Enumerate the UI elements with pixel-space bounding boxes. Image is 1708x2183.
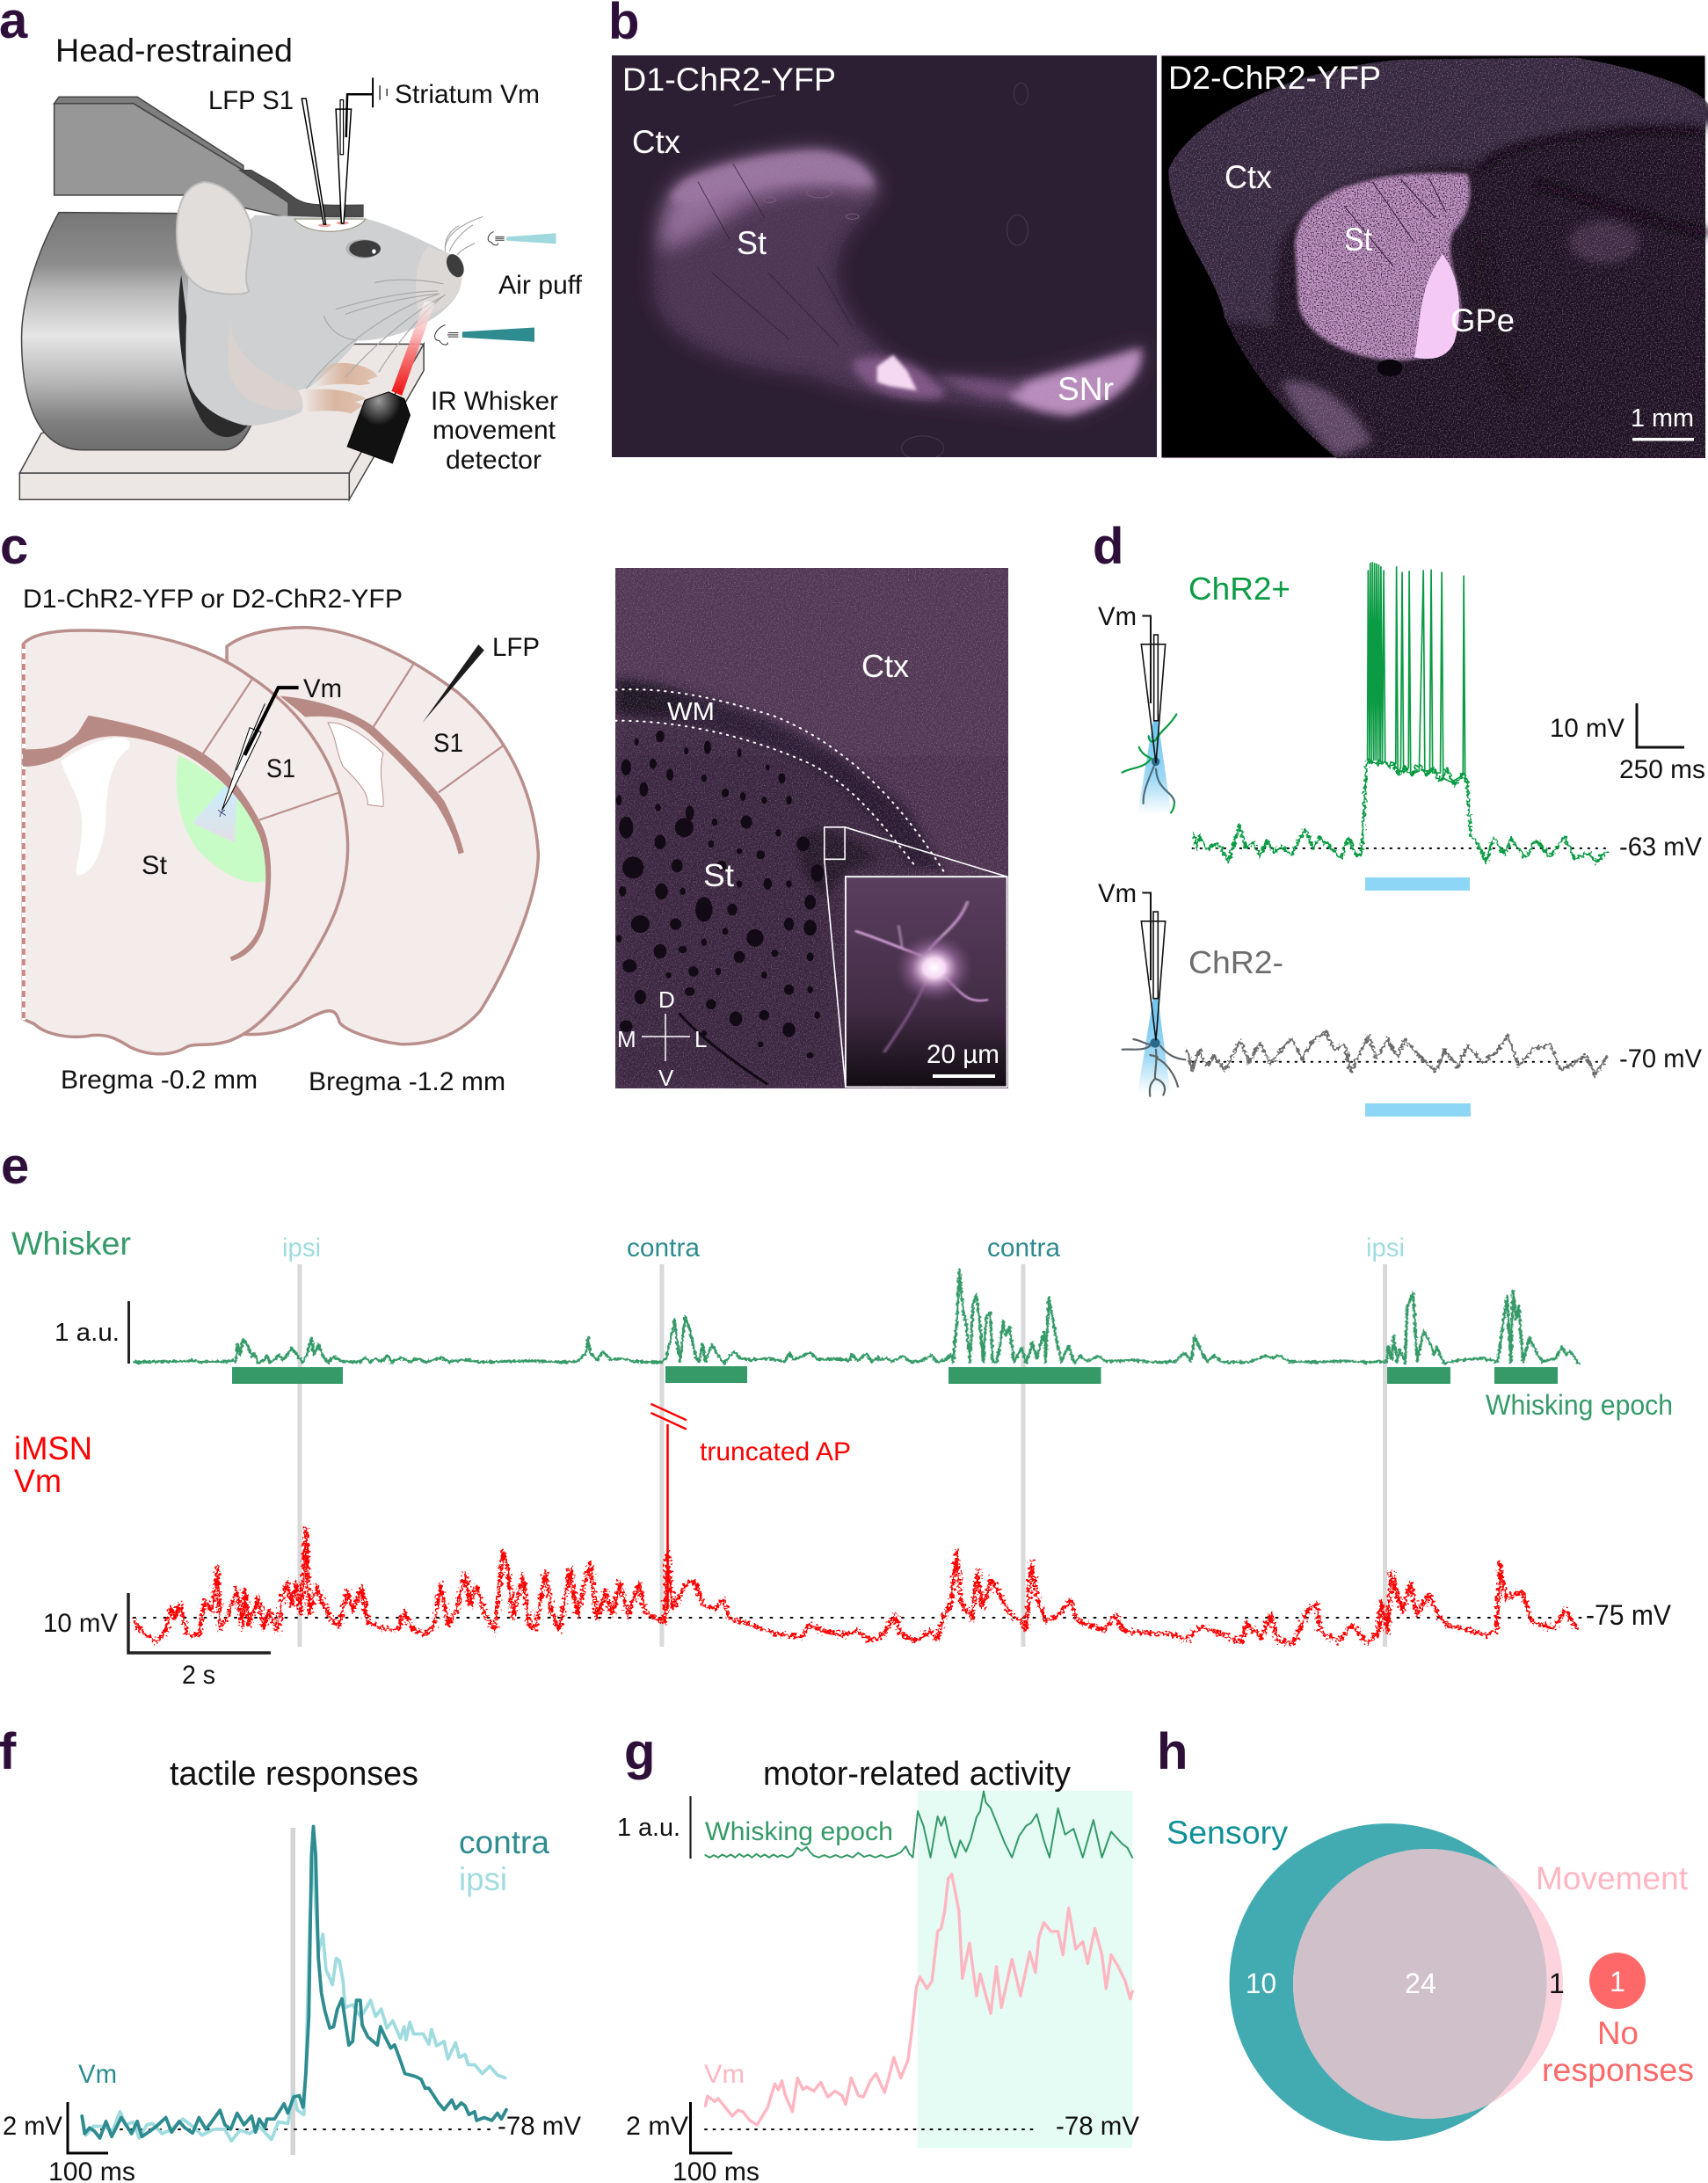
label: Air puff: Air puff [498,271,583,300]
panel e: whisker and Vm recording [1,1138,1673,1690]
label Whisking epoch: Whisking epoch [1486,1389,1673,1421]
icon: pipette on ChR2- neuron [1123,892,1185,1096]
truncated action potential [666,1424,669,1609]
labels on schematic: Vm [303,674,342,703]
scale and potential labels: 10 mV [43,1609,118,1638]
panel f: tactile responses [0,1723,581,2183]
scale and potential labels [1550,714,1705,1073]
LFP electrode [302,98,326,224]
labels on images: GPe [1450,302,1515,338]
light stimulus bars [1365,877,1471,1117]
eye [345,239,381,258]
label Whisking epoch: Whisking epoch [705,1817,893,1846]
label No responses: No [1597,2015,1639,2051]
title motor-related activity: motor-related activity [763,1756,1071,1793]
ear [177,182,251,295]
midline dashed [22,643,25,1020]
scale bar 1 mm [1632,438,1694,441]
label 1 a.u.: 1 a.u. [617,1814,680,1842]
label: IR whisker movement detector: movement [432,416,556,445]
coronal brain sections schematic [23,628,538,1054]
label iMSN Vm [14,1430,92,1499]
grey voltage trace [1187,1031,1607,1075]
snout [416,246,462,317]
labels on images: SNr [1058,371,1114,407]
label iMSN Vm: Vm [14,1463,62,1499]
truncation marks [650,1404,687,1430]
scale and potential labels: 2 mV [626,2112,688,2141]
labels on images: 1 mm [1631,404,1694,433]
inset: filled neuron [846,877,1007,1087]
green expression area [177,755,268,883]
scale and potential labels: 2 mV [3,2112,62,2141]
scale and potential labels: -70 mV [1619,1044,1702,1073]
stimulus labels [282,1233,1405,1263]
Vm labels: Vm [1098,879,1137,908]
green trace baseline and plateau [1194,760,1607,862]
histology image with inset [615,568,1008,1091]
ipsi trace [82,1840,505,2141]
limb shading and paws [228,317,377,413]
whisking highlight region [918,1791,1132,2148]
label Movement: Movement [1536,1860,1689,1896]
whisker trace [134,1270,1578,1363]
scale bar d [1637,703,1684,747]
labels on schematic: Bregma -1.2 mm [309,1067,505,1096]
legend contra ipsi: contra [459,1824,549,1860]
scale and potential labels: -78 mV [1056,2112,1139,2141]
scale and potential labels: 10 mV [1550,714,1624,743]
scale and potential labels: -75 mV [1586,1599,1672,1631]
label Vm: Vm [704,2060,745,2089]
labels on images: St [1344,222,1373,258]
label 1 a.u.: 1 a.u. [55,1319,120,1347]
panel c: recording schematic and image [0,518,1008,1096]
scale bar 1 a.u. [127,1301,130,1364]
whisker trace [705,1791,1132,1858]
image labels: St [703,857,734,893]
labels on schematic: S1 [266,754,295,783]
label: IR whisker movement detector: detector [446,446,541,475]
corpus callosum front [23,716,271,961]
scale and potential labels: 250 ms [1619,755,1705,784]
labels on images [622,60,1694,433]
label: LFP S1: LFP S1 [208,86,294,115]
Venn counts: 1 [1549,1968,1565,1999]
legend contra ipsi [459,1824,549,1897]
heading: Head-restrained: Head-restrained [55,33,293,69]
label No responses: responses [1542,2052,1694,2088]
stimulus labels: contra [627,1233,700,1263]
air puff contra nozzle [435,325,534,345]
striatal fibre bundles [616,731,824,1059]
green action potentials [1368,563,1465,782]
nose [443,252,467,279]
front section Bregma -0.2 [23,630,348,1054]
scale and potential labels: -63 mV [1619,833,1702,862]
labels on images: St [737,225,767,261]
back corpus callosum [280,696,464,855]
image labels: Ctx [861,648,909,684]
red Vm trace [134,1529,1577,1644]
labels on schematic: LFP [492,633,540,662]
label ChR2-: ChR2- [1188,944,1283,980]
LFP electrode [423,644,484,723]
labels on schematic: Bregma -0.2 mm [61,1066,258,1095]
image labels: L [694,1026,707,1052]
pink Vm trace [705,1874,1132,2125]
panel letter c: c [0,518,28,575]
scale bar 10 mV, 2 s [128,1593,271,1653]
panel a: head-restrained setup [0,0,583,499]
labels on schematic [61,633,540,1096]
orientation cross [642,1014,690,1061]
stimulus labels: contra [987,1233,1060,1263]
label No responses [1542,2015,1694,2088]
no-response marker: 1 [1610,1966,1625,1997]
no-response marker [1589,1953,1646,2009]
base plate [19,344,424,499]
ventricle front [61,738,130,876]
air puff ipsi nozzle [488,231,556,245]
Venn counts [1246,1968,1565,1999]
scale and potential labels [3,2112,581,2183]
baseline dotted lines [1193,848,1607,1062]
labels on images: Ctx [1225,159,1272,195]
image labels [617,648,999,1091]
panel letter d: d [1093,518,1123,575]
mouse body [185,215,462,426]
label Vm: Vm [78,2060,117,2089]
jaw line and whiskers [306,216,483,389]
labels on schematic: St [142,851,168,880]
panel b: histology images [608,0,1708,460]
panel d: optogenetic identification [1093,518,1705,1117]
mouse apparatus illustration [19,77,556,499]
contra trace [82,1826,506,2138]
label ChR2+: ChR2+ [1188,571,1290,607]
heading: D1-ChR2-YFP or D2-ChR2-YFP: D1-ChR2-YFP or D2-ChR2-YFP [23,585,403,614]
Venn counts: 24 [1405,1968,1436,1999]
image labels: 20 µm [927,1040,999,1069]
image labels: M [617,1026,636,1052]
stimulus marker lines [300,1264,1385,1647]
labels on images: Ctx [632,124,680,160]
scale bar f [68,2102,108,2153]
label Whisker: Whisker [11,1226,131,1262]
stimulus marker [290,1828,295,2155]
zoom box and connector lines [825,827,1007,1088]
baseline dotted line [134,1617,1582,1619]
Venn circles [1229,1823,1563,2141]
white matter dotted borders [615,689,945,873]
scale and potential labels: 2 s [182,1661,215,1690]
panel h: Venn diagram [1157,1723,1694,2141]
label Sensory: Sensory [1167,1815,1289,1851]
baseline dotted line [91,2128,497,2130]
labels on images: D2-ChR2-YFP [1168,60,1381,96]
scale bar g [691,2102,732,2153]
title tactile responses: tactile responses [170,1756,418,1793]
baseline dotted line [705,2128,1037,2130]
head mount [55,97,363,218]
image labels: WM [667,698,715,726]
IR detector [347,392,410,463]
midline dashed overlay [22,643,25,1020]
scale and potential labels [626,2112,1139,2183]
labels on images: D1-ChR2-YFP [622,62,836,98]
craniotomy [294,219,366,231]
image labels: D [658,986,675,1013]
label: IR whisker movement detector [431,387,558,475]
whisking epoch bars [232,1366,1558,1384]
panel letter g: g [624,1723,655,1780]
scale and potential labels: -78 mV [498,2112,581,2141]
label: IR whisker movement detector: IR Whisker [431,387,558,416]
scale bar 20 um [933,1074,995,1078]
label iMSN Vm: iMSN [14,1430,92,1466]
IR beam [392,301,435,396]
panel letter e: e [1,1138,29,1195]
label truncated AP: truncated AP [700,1437,851,1466]
image labels: V [658,1065,674,1091]
light cone [193,779,238,843]
scale and potential labels [43,1599,1672,1690]
Vm pipette [218,688,299,817]
stimulus labels: ipsi [282,1233,321,1263]
icon: pipette on ChR2+ neuron [1123,615,1176,814]
legend contra ipsi: ipsi [459,1861,507,1897]
labels on schematic: S1 [433,729,463,758]
image: D2-ChR2-YFP section [1154,52,1708,458]
scale bar 1 a.u. [689,1796,692,1859]
cylinder tube [22,213,251,450]
panel g: motor-related activity [617,1723,1139,2183]
stimulus labels: ipsi [1366,1233,1405,1263]
label: Striatum Vm: Striatum Vm [395,80,540,109]
Vm labels [1098,602,1137,908]
image: D1-ChR2-YFP section [612,55,1157,460]
panel letter h: h [1157,1723,1188,1780]
back ventricle [328,723,383,806]
Venn counts: 10 [1246,1968,1276,1999]
back section Bregma -1.2 [227,628,538,1044]
Vm pipette with wire [336,77,387,223]
Vm labels: Vm [1098,602,1137,631]
S1 borders [202,664,503,820]
